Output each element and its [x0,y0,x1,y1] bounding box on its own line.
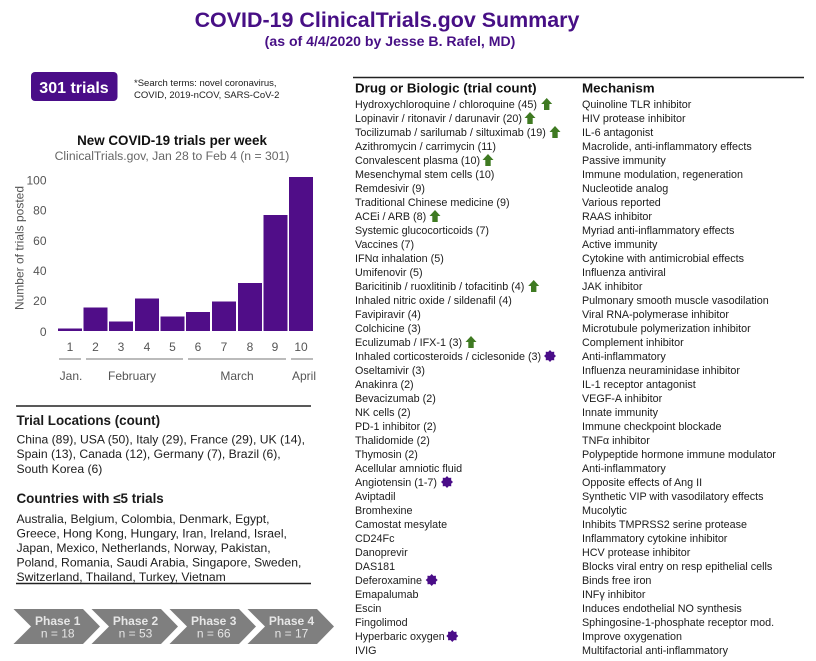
drug list: IVIG [355,645,377,657]
phase 4: Phase 4 [269,614,315,628]
mechanism list: Opposite effects of Ang II [582,477,702,489]
drug list: Bevacizumab (2) [355,393,436,405]
drug list: Thymosin (2) [355,449,418,461]
mechanism list: Complement inhibitor [582,337,684,349]
mechanism list: HIV protease inhibitor [582,113,686,125]
mechanism list: Immune modulation, regeneration [582,169,743,181]
y axis ticks: 80 [33,204,47,218]
phase 3: Phase 3 [191,614,237,628]
drug list: Vaccines (7) [355,239,414,251]
x axis week labels: 8 [247,340,254,354]
drug list [355,99,546,657]
x axis week labels: 3 [118,340,125,354]
drug list: Lopinavir / ritonavir / darunavir (20) [355,113,522,125]
mechanism list: Active immunity [582,239,658,251]
mechanism list: Anti-inflammatory [582,351,666,363]
countries list: Australia, Belgium, Colombia, Denmark, Egypt, [16,512,270,526]
x axis week labels: 1 [67,340,74,354]
drug list: Tocilizumab / sarilumab / siltuximab (19) [355,127,546,139]
y axis ticks: 100 [26,174,47,188]
search terms note [134,78,279,101]
drug list: CD24Fc [355,533,395,545]
y axis ticks: 40 [33,264,47,278]
y axis ticks [26,174,47,339]
mechanism list: Polypeptide hormone immune modulator [582,449,776,461]
countries list: Greece, Hong Kong, Hungary, Iran, Ireland, Israel, [16,526,287,540]
drug list: IFNα inhalation (5) [355,253,444,265]
x axis month labels: April [292,369,316,383]
mechanism list: JAK inhibitor [582,281,643,293]
countries list: Poland, Romania, Saudi Arabia, Singapore, Sweden, [16,556,301,570]
drug list: Anakinra (2) [355,379,414,391]
chart heading: New COVID-19 trials per week [77,133,267,148]
phase 2: n = 53 [119,626,153,640]
drug list: Azithromycin / carrimycin (11) [355,141,496,153]
mechanism list: Microtubule polymerization inhibitor [582,323,751,335]
x axis week labels: 6 [195,340,202,354]
mechanism list: Immune checkpoint blockade [582,421,721,433]
bars [58,177,313,331]
mechanism list: Synthetic VIP with vasodilatory effects [582,491,764,503]
trial locations list: South Korea (6) [16,462,102,476]
countries heading: Countries with ≤5 trials [16,491,164,506]
icons: green up arrows [430,98,560,348]
mechanism list: Cytokine with antimicrobial effects [582,253,744,265]
mechanism list: Influenza antiviral [582,267,666,279]
drug list: Umifenovir (5) [355,267,423,279]
phase 1: n = 18 [41,626,75,640]
drug list: Danoprevir [355,547,408,559]
x axis week labels: 9 [272,340,279,354]
drug list: Baricitinib / ruoxlitinib / tofacitinb (4) [355,281,524,293]
drug list: Hyperbaric oxygen [355,631,445,643]
mechanism list: Multifactorial anti-inflammatory [582,645,729,657]
x axis week labels: 5 [169,340,176,354]
mechanism list: Innate immunity [582,407,659,419]
icons: purple stars [426,350,556,642]
mechanism list: Inhibits TMPRSS2 serine protease [582,519,747,531]
drug list: Bromhexine [355,505,412,517]
search terms note: *Search terms: novel coronavirus, [134,78,277,89]
title: COVID-19 ClinicalTrials.gov Summary [195,8,579,32]
mechanism list: RAAS inhibitor [582,211,652,223]
drug list: Escin [355,603,381,615]
drug list: PD-1 inhibitor (2) [355,421,436,433]
drug list: Convalescent plasma (10) [355,155,480,167]
mechanism list: Myriad anti-inflammatory effects [582,225,734,237]
drug list: Hydroxychloroquine / chloroquine (45) [355,99,537,111]
drug list: Angiotensin (1-7) [355,477,437,489]
x axis week labels: 4 [144,340,151,354]
drug list: Systemic glucocorticoids (7) [355,225,489,237]
mechanism list: Influenza neuraminidase inhibitor [582,365,740,377]
phase chevrons [14,609,334,644]
drug list: Mesenchymal stem cells (10) [355,169,494,181]
search terms note: COVID, 2019-nCOV, SARS-CoV-2 [134,90,279,101]
phase 2: Phase 2 [113,614,159,628]
countries list: Japan, Mexico, Netherlands, Norway, Pakistan, [16,541,271,555]
badge: 301 trials: 301 trials [39,80,109,97]
mechanism list: Induces endothelial NO synthesis [582,603,742,615]
phase 2 [92,609,178,644]
x axis month labels: Jan. [60,369,82,383]
mechanism list: Anti-inflammatory [582,463,666,475]
y axis ticks: 60 [33,234,47,248]
drug list: Aviptadil [355,491,396,503]
mechanism list: Passive immunity [582,155,666,167]
drug list: Inhaled corticosteroids / ciclesonide (3) [355,351,541,363]
drug list: Deferoxamine [355,575,422,587]
drug column heading: Drug or Biologic (trial count) [355,80,537,96]
mechanism list: Quinoline TLR inhibitor [582,99,692,111]
mechanism list: TNFα inhibitor [582,435,650,447]
mechanism list: Inflammatory cytokine inhibitor [582,533,728,545]
phase 4: n = 17 [275,626,309,640]
drug list: ACEi / ARB (8) [355,211,426,223]
mechanism list: Nucleotide analog [582,183,668,195]
x axis week labels [67,340,308,354]
mechanism list: IL-6 antagonist [582,127,653,139]
phase 1 [14,609,100,644]
bar chart: new trials per week [12,133,316,383]
x axis week labels: 7 [221,340,228,354]
mechanism list: Sphingosine-1-phosphate receptor mod. [582,617,774,629]
mechanism list: VEGF-A inhibitor [582,393,663,405]
trial locations list: China (89), USA (50), Italy (29), France (29), UK (14), [16,432,305,446]
trial locations list: Spain (13), Canada (12), Germany (7), Brazil (6), [16,447,281,461]
y axis ticks: 0 [40,325,47,339]
drug list: Oseltamivir (3) [355,365,425,377]
drug list: Colchicine (3) [355,323,421,335]
drug list: NK cells (2) [355,407,411,419]
drug list: Favipiravir (4) [355,309,421,321]
mechanism list: Blocks viral entry on resp epithelial cells [582,561,772,573]
drug list: Remdesivir (9) [355,183,425,195]
x axis week labels: 10 [294,340,308,354]
mechanism list: Various reported [582,197,661,209]
mechanism list: Pulmonary smooth muscle vasodilation [582,295,769,307]
y axis ticks: 20 [33,294,47,308]
countries list: Switzerland, Thailand, Turkey, Vietnam [16,570,226,584]
y axis title: Number of trials posted [12,186,26,310]
drug list: Acellular amniotic fluid [355,463,462,475]
mechanism list: Improve oxygenation [582,631,682,643]
mechanism column heading: Mechanism [582,80,655,96]
drug list: Thalidomide (2) [355,435,430,447]
mechanism list: Binds free iron [582,575,651,587]
mechanism list: Macrolide, anti-inflammatory effects [582,141,752,153]
drug list: Camostat mesylate [355,519,447,531]
drug list: Emapalumab [355,589,418,601]
phase 1: Phase 1 [35,614,81,628]
mechanism list: Viral RNA-polymerase inhibitor [582,309,729,321]
subtitle: (as of 4/4/2020 by Jesse B. Rafel, MD) [265,33,515,49]
phase 4 [248,609,334,644]
trial locations list [16,432,305,476]
phase 3 [170,609,256,644]
mechanism list: IL-1 receptor antagonist [582,379,696,391]
mechanism list [582,99,776,657]
drug list: Fingolimod [355,617,408,629]
badge: 301 trials [31,72,118,101]
x axis month labels: March [220,369,254,383]
trial locations heading: Trial Locations (count) [16,413,160,428]
mechanism list: INFγ inhibitor [582,589,646,601]
x axis week labels: 2 [92,340,99,354]
x axis month labels [60,369,316,383]
mechanism list: Mucolytic [582,505,627,517]
drug list: Inhaled nitric oxide / sildenafil (4) [355,295,512,307]
phase 3: n = 66 [197,626,231,640]
drug list: Eculizumab / IFX-1 (3) [355,337,462,349]
drug list: Traditional Chinese medicine (9) [355,197,510,209]
chart subtitle: ClinicalTrials.gov, Jan 28 to Feb 4 (n = 301) [55,149,289,163]
x axis month labels: February [108,369,156,383]
countries list [16,512,301,584]
drug list: DAS181 [355,561,395,573]
mechanism list: HCV protease inhibitor [582,547,691,559]
